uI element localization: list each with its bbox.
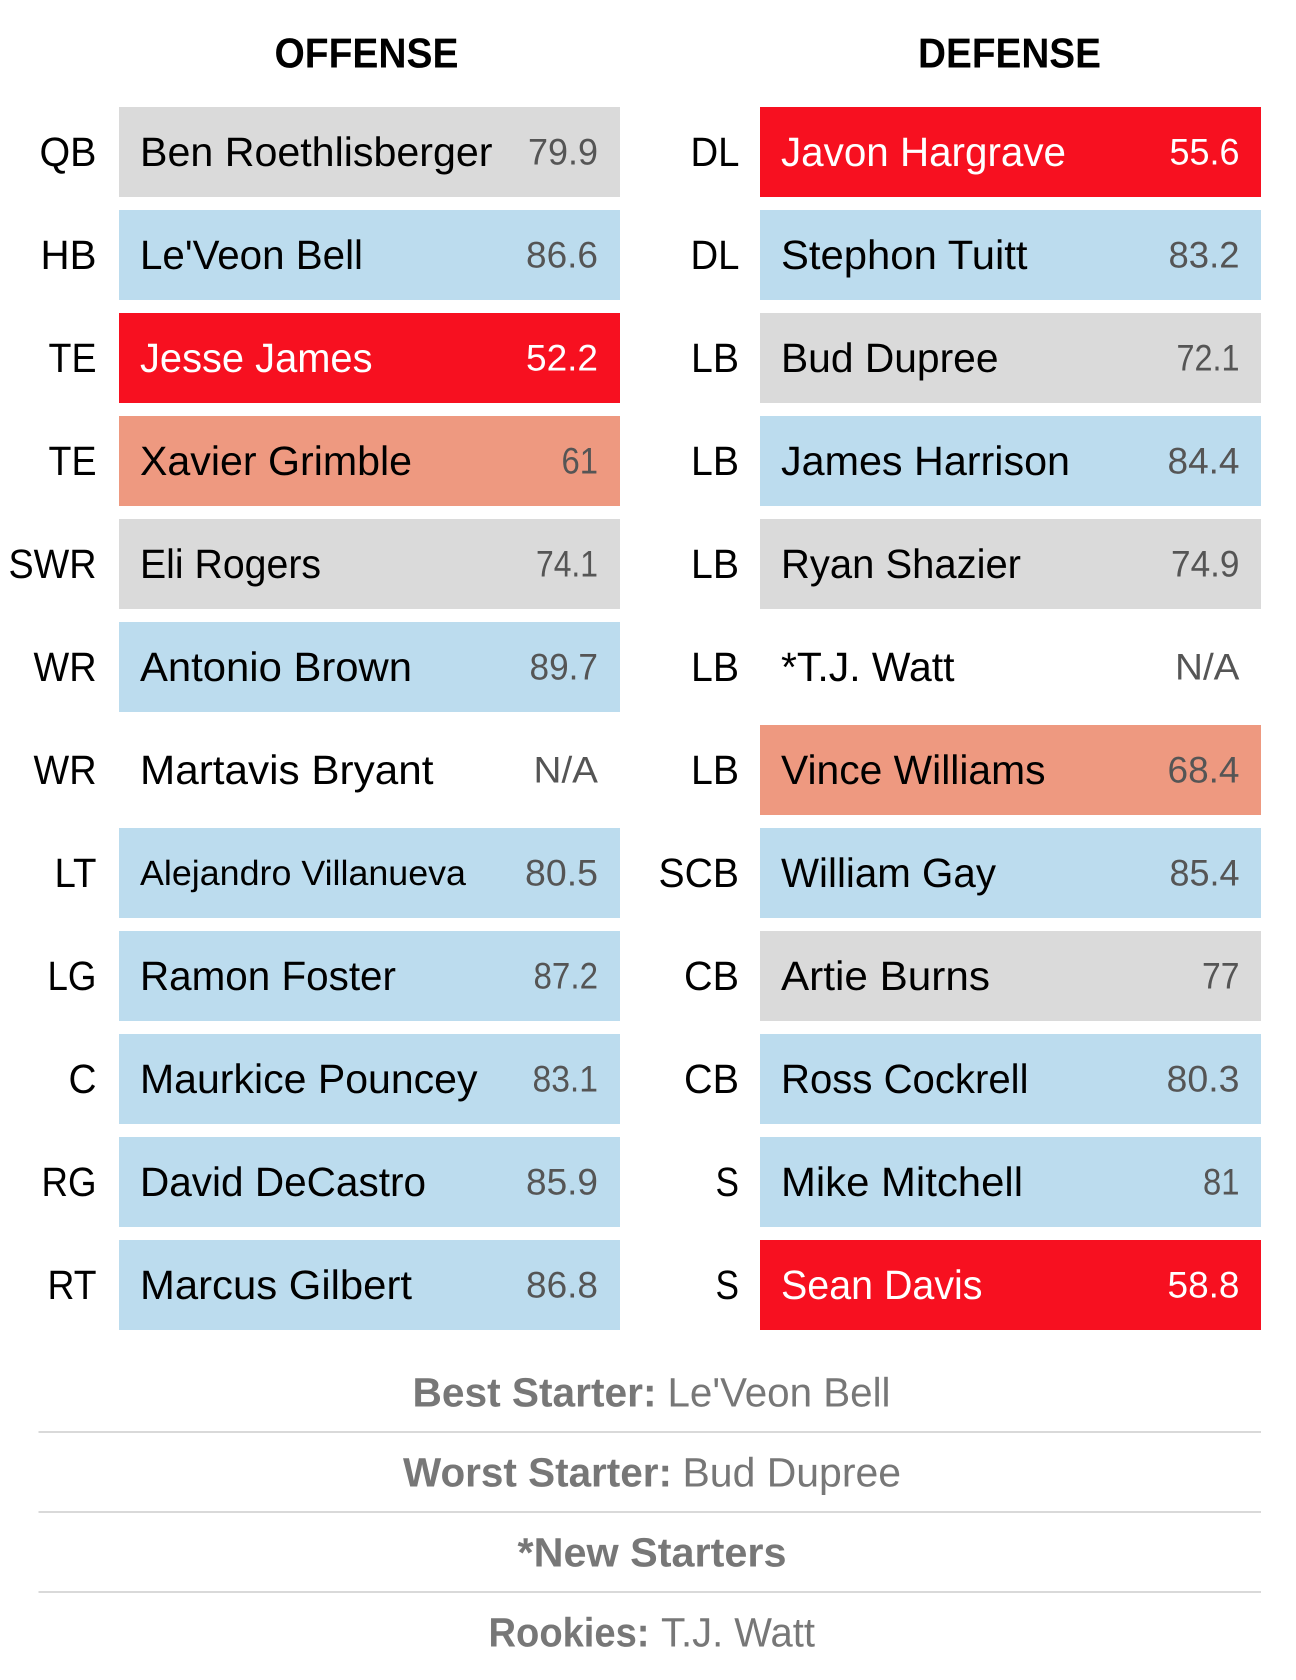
row: LB James Harrison: James Harrison bbox=[781, 438, 1070, 484]
row: CB Artie Burns: 77 bbox=[1202, 956, 1240, 996]
row: C Maurkice Pouncey bbox=[68, 1034, 620, 1124]
row: TE Xavier Grimble: 61 bbox=[562, 440, 598, 482]
row: SCB William Gay: 85.4 bbox=[1170, 852, 1240, 894]
row: TE Xavier Grimble bbox=[48, 416, 620, 506]
row: CB Ross Cockrell: Ross Cockrell bbox=[781, 1056, 1028, 1102]
row: LG Ramon Foster: LG bbox=[48, 953, 96, 999]
row: HB Le'Veon Bell: 86.6 bbox=[526, 234, 598, 276]
row: SWR Eli Rogers: 74.1 bbox=[536, 544, 598, 584]
row: CB Ross Cockrell bbox=[684, 1034, 1261, 1124]
row: LG Ramon Foster bbox=[48, 931, 620, 1021]
heading: defense: DEFENSE bbox=[918, 30, 1101, 76]
row: DL Javon Hargrave: DL bbox=[690, 129, 740, 175]
row: LT Alejandro Villanueva: 80.5 bbox=[525, 852, 598, 894]
row: LB Vince Williams: 68.4 bbox=[1168, 750, 1240, 790]
row: LG Ramon Foster: Ramon Foster bbox=[140, 953, 396, 999]
row: LB Bud Dupree: LB bbox=[691, 335, 739, 381]
row: SCB William Gay: SCB bbox=[658, 850, 739, 896]
row: QB Ben Roethlisberger bbox=[40, 107, 620, 197]
row: HB Le'Veon Bell: HB bbox=[40, 232, 96, 278]
row: QB Ben Roethlisberger: QB bbox=[40, 129, 96, 175]
note: rookies: Rookies: bbox=[488, 1610, 650, 1656]
row: DL Stephon Tuitt: DL bbox=[690, 232, 740, 278]
row: QB Ben Roethlisberger: 79.9 bbox=[528, 132, 598, 172]
row: LB Ryan Shazier bbox=[691, 519, 1261, 609]
row: C Maurkice Pouncey: C bbox=[68, 1056, 96, 1102]
row: CB Artie Burns: CB bbox=[684, 953, 739, 999]
row: CB Artie Burns: Artie Burns bbox=[781, 953, 990, 999]
row: DL Stephon Tuitt: 83.2 bbox=[1168, 234, 1240, 276]
row: SWR Eli Rogers bbox=[8, 519, 620, 609]
note: worst starter: Worst Starter: bbox=[403, 1450, 672, 1496]
row: DL Javon Hargrave bbox=[690, 107, 1261, 197]
row: LG Ramon Foster: 87.2 bbox=[534, 956, 598, 996]
row: LT Alejandro Villanueva: Alejandro Villanueva bbox=[140, 854, 467, 893]
row: WR Martavis Bryant: N/A bbox=[534, 750, 598, 790]
row: TE Xavier Grimble: Xavier Grimble bbox=[140, 438, 412, 484]
row: CB Ross Cockrell: 80.3 bbox=[1166, 1058, 1240, 1100]
note: best starter: Le'Veon Bell bbox=[668, 1370, 890, 1416]
row: S Mike Mitchell: Mike Mitchell bbox=[781, 1159, 1023, 1205]
row: S Mike Mitchell: 81 bbox=[1203, 1162, 1240, 1202]
row: HB Le'Veon Bell: Le'Veon Bell bbox=[140, 232, 363, 278]
row: LB T.J. Watt: N/A bbox=[1175, 646, 1240, 688]
panel: offense roster bbox=[8, 107, 620, 1330]
note: best starter bbox=[412, 1370, 890, 1416]
row: RG David DeCastro: 85.9 bbox=[526, 1162, 598, 1202]
row: WR Antonio Brown: 89.7 bbox=[530, 646, 598, 688]
row: LB Vince Williams bbox=[691, 725, 1261, 815]
row: RT Marcus Gilbert: RT bbox=[48, 1262, 96, 1308]
row: LB Vince Williams: Vince Williams bbox=[781, 747, 1046, 793]
note: worst starter: Bud Dupree bbox=[682, 1450, 901, 1496]
row: C Maurkice Pouncey: 83.1 bbox=[532, 1058, 598, 1100]
row: S Mike Mitchell bbox=[716, 1137, 1261, 1227]
row: LB T.J. Watt bbox=[691, 644, 1240, 690]
row: SCB William Gay bbox=[658, 828, 1261, 918]
row: SWR Eli Rogers: Eli Rogers bbox=[140, 541, 321, 587]
row: RG David DeCastro: RG bbox=[42, 1159, 96, 1205]
row: TE Jesse James: 52.2 bbox=[526, 338, 598, 378]
row: RT Marcus Gilbert bbox=[48, 1240, 620, 1330]
row: WR Antonio Brown: WR bbox=[34, 644, 96, 690]
row: LB Ryan Shazier: LB bbox=[691, 541, 739, 587]
note: worst starter bbox=[403, 1450, 901, 1496]
row: SCB William Gay: William Gay bbox=[781, 850, 996, 896]
row: QB Ben Roethlisberger: Ben Roethlisberger bbox=[140, 129, 492, 175]
row: TE Jesse James bbox=[48, 313, 620, 403]
row: LB James Harrison: LB bbox=[691, 438, 739, 484]
row: DL Javon Hargrave: 55.6 bbox=[1170, 132, 1240, 172]
row: WR Antonio Brown: Antonio Brown bbox=[140, 644, 412, 690]
note: rookies: T.J. Watt bbox=[661, 1610, 816, 1656]
row: S Mike Mitchell: S bbox=[716, 1159, 739, 1205]
row: C Maurkice Pouncey: Maurkice Pouncey bbox=[140, 1056, 478, 1102]
row: LB Bud Dupree bbox=[691, 313, 1261, 403]
panel: defense roster bbox=[658, 107, 1261, 1330]
row: TE Jesse James: Jesse James bbox=[140, 335, 372, 381]
row: RT Marcus Gilbert: Marcus Gilbert bbox=[140, 1262, 413, 1308]
row: DL Stephon Tuitt: Stephon Tuitt bbox=[781, 232, 1028, 278]
row: WR Martavis Bryant: Martavis Bryant bbox=[140, 747, 434, 793]
row: LB T.J. Watt: *T.J. Watt bbox=[781, 644, 955, 690]
row: LB Bud Dupree: 72.1 bbox=[1176, 338, 1240, 378]
footer notes bbox=[38, 1370, 1261, 1656]
heading: offense: OFFENSE bbox=[274, 30, 458, 76]
row: LB T.J. Watt: LB bbox=[691, 644, 739, 690]
row: S Sean Davis: Sean Davis bbox=[781, 1262, 982, 1308]
note: best starter: Best Starter: bbox=[412, 1370, 656, 1416]
row: WR Martavis Bryant bbox=[34, 747, 598, 793]
row: LB James Harrison: 84.4 bbox=[1168, 440, 1240, 482]
row: S Sean Davis bbox=[716, 1240, 1261, 1330]
row: CB Artie Burns bbox=[684, 931, 1261, 1021]
note: rookies bbox=[488, 1610, 816, 1656]
row: LB Bud Dupree: Bud Dupree bbox=[781, 335, 998, 381]
row: LB James Harrison bbox=[691, 416, 1261, 506]
row: RG David DeCastro: David DeCastro bbox=[140, 1159, 426, 1205]
row: WR Martavis Bryant: WR bbox=[34, 747, 96, 793]
row: LB Ryan Shazier: 74.9 bbox=[1171, 544, 1240, 584]
row: SWR Eli Rogers: SWR bbox=[8, 541, 96, 587]
row: HB Le'Veon Bell bbox=[40, 210, 620, 300]
row: LT Alejandro Villanueva bbox=[54, 828, 620, 918]
row: CB Ross Cockrell: CB bbox=[684, 1056, 739, 1102]
row: DL Javon Hargrave: Javon Hargrave bbox=[781, 129, 1066, 175]
row: WR Antonio Brown bbox=[34, 622, 620, 712]
row: TE Xavier Grimble: TE bbox=[48, 438, 96, 484]
row: LB Ryan Shazier: Ryan Shazier bbox=[781, 541, 1021, 587]
row: DL Stephon Tuitt bbox=[690, 210, 1261, 300]
note: new starters: *New Starters bbox=[518, 1530, 786, 1576]
row: S Sean Davis: S bbox=[716, 1262, 739, 1308]
row: RT Marcus Gilbert: 86.8 bbox=[526, 1264, 598, 1306]
row: TE Jesse James: TE bbox=[48, 335, 96, 381]
row: LB Vince Williams: LB bbox=[691, 747, 739, 793]
row: S Sean Davis: 58.8 bbox=[1168, 1264, 1240, 1306]
row: RG David DeCastro bbox=[42, 1137, 620, 1227]
row: LT Alejandro Villanueva: LT bbox=[54, 850, 96, 896]
